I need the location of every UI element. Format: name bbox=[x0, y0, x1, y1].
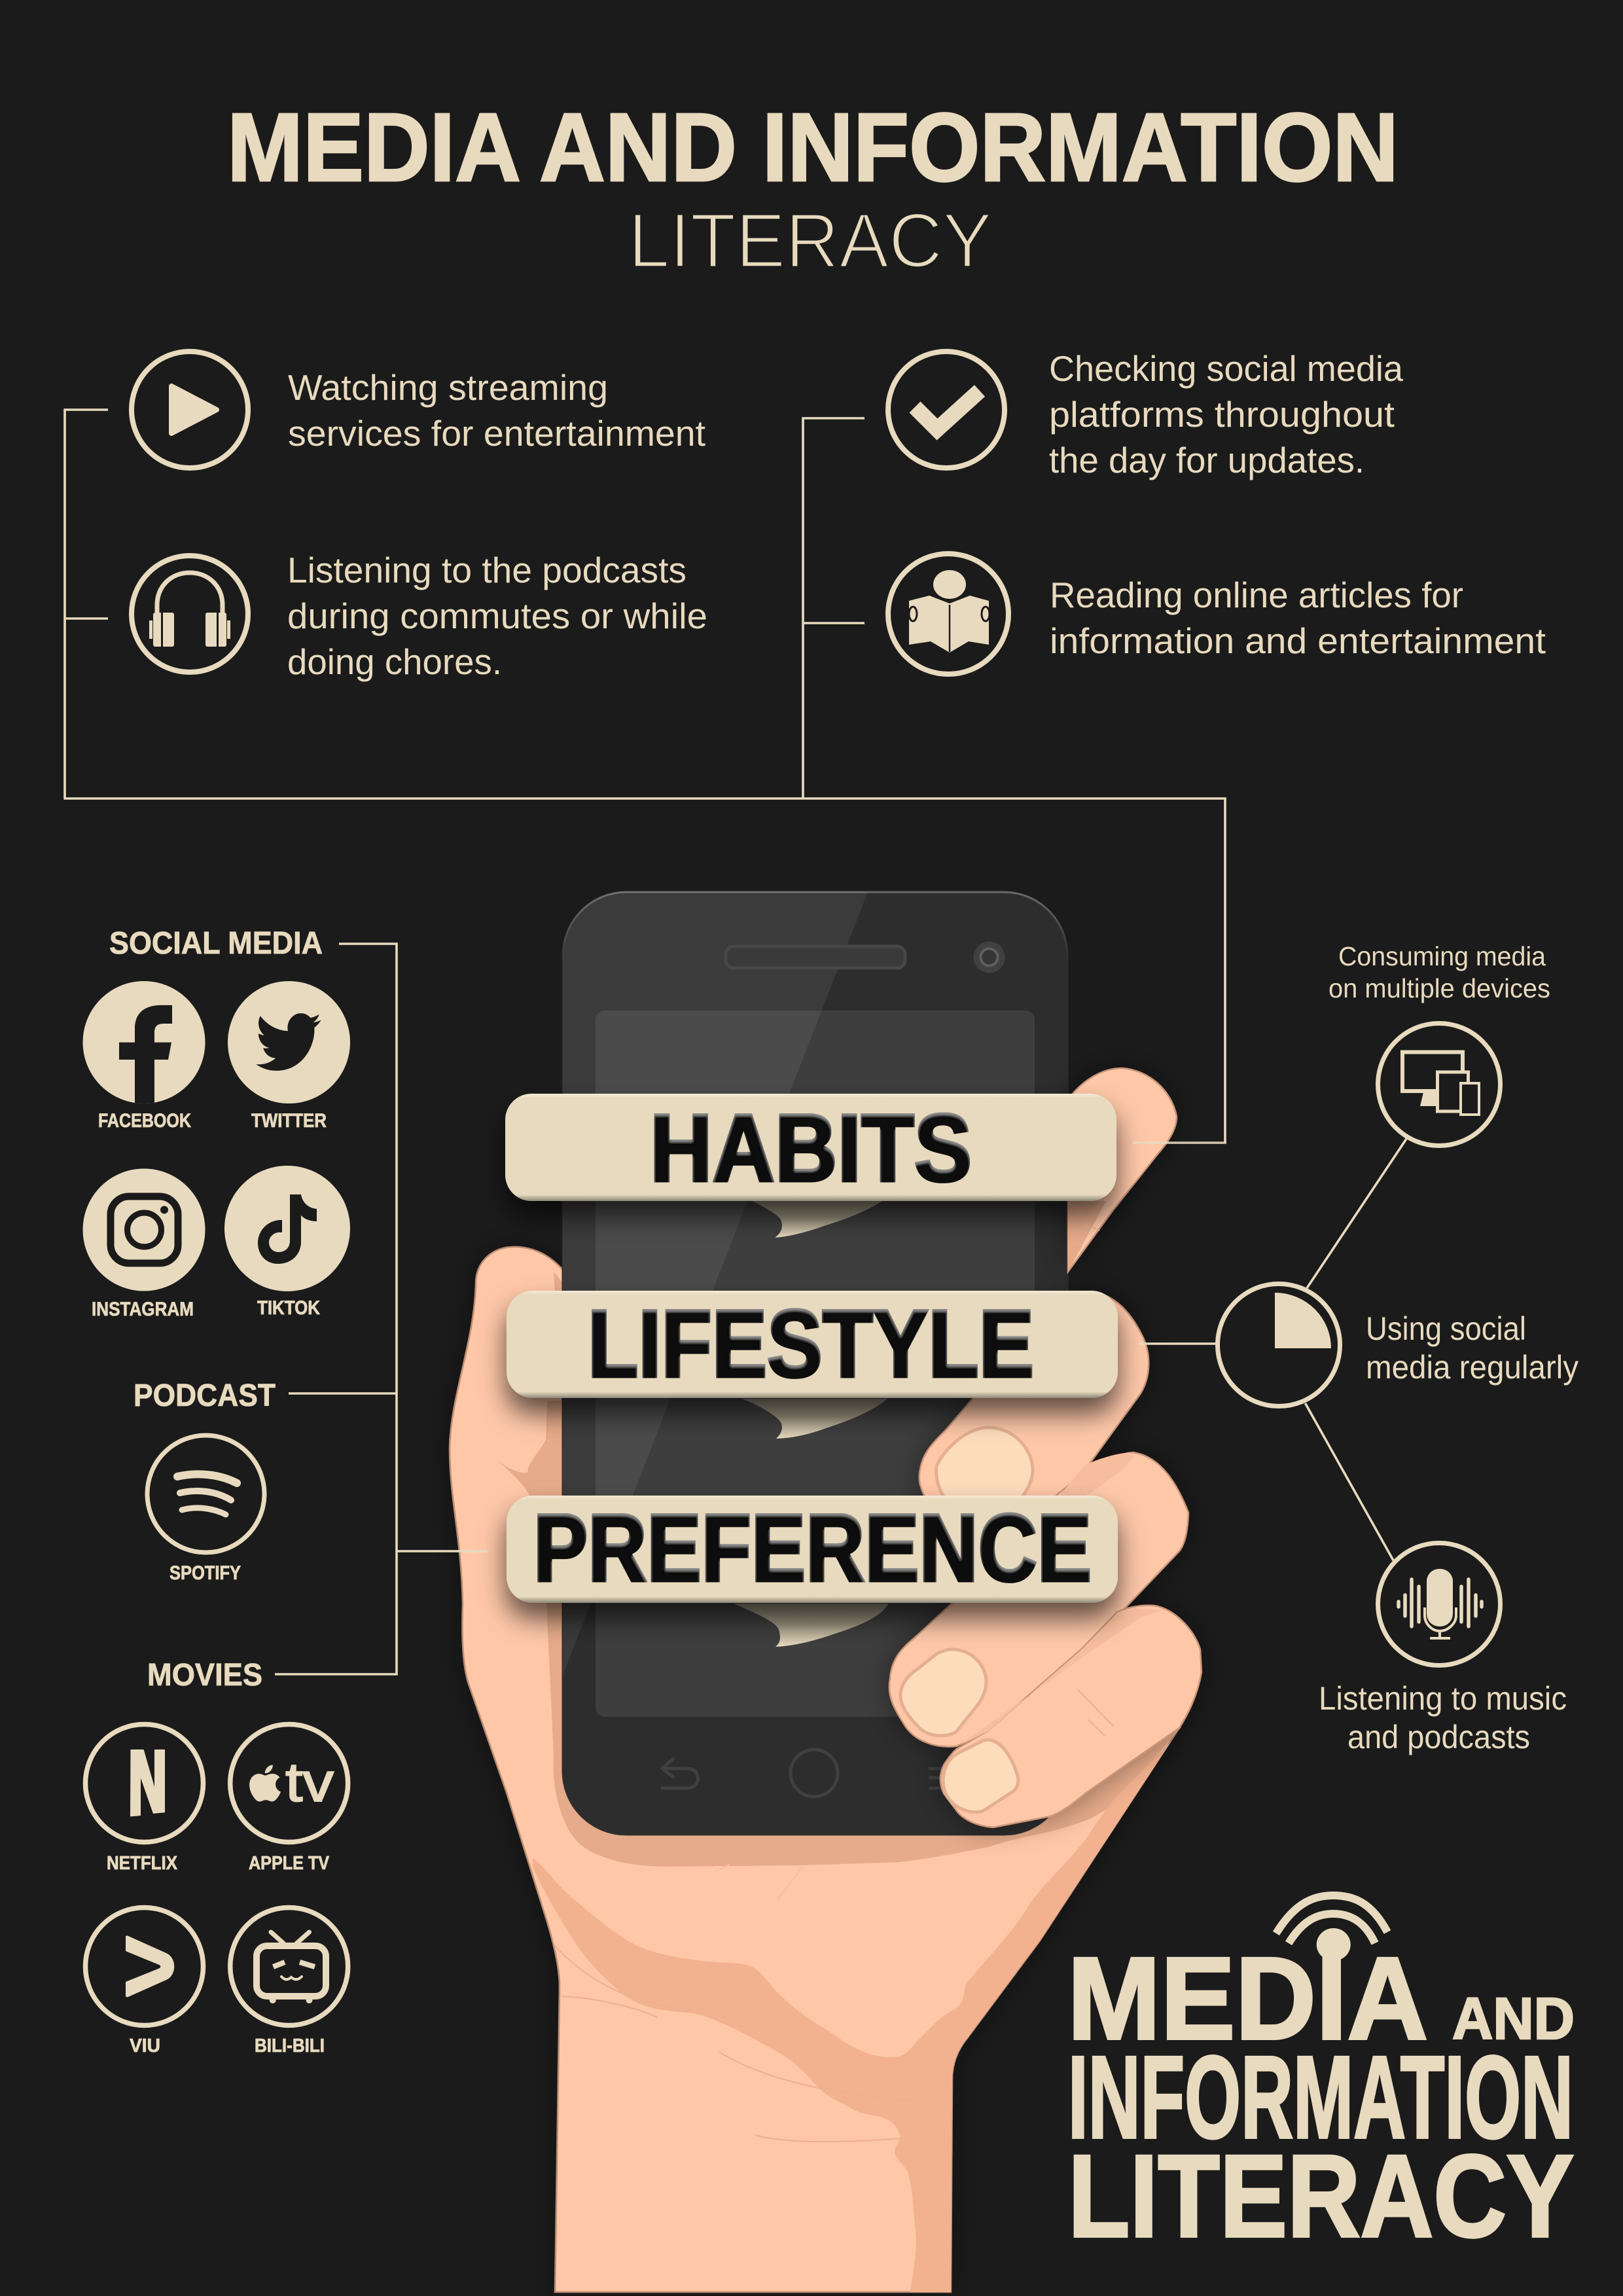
connector: habits to finger bbox=[1133, 1141, 1226, 1144]
label bar bbox=[505, 1094, 1116, 1201]
text: multiple devices bbox=[1329, 941, 1550, 1003]
text: reading: Reading online articles for bbox=[1050, 575, 1463, 615]
finger two bbox=[919, 1291, 1149, 1571]
text: streaming bbox=[288, 367, 705, 454]
text: social media regularly: media regularly bbox=[1366, 1349, 1578, 1386]
connector lines bbox=[275, 944, 488, 1674]
icon: play button bbox=[132, 351, 248, 468]
panel: streaming item bbox=[132, 351, 705, 468]
finger one bbox=[1068, 1068, 1177, 1272]
label: instagram: INSTAGRAM bbox=[92, 1299, 194, 1320]
text: multiple devices: on multiple devices bbox=[1329, 973, 1550, 1003]
text: reading: information and entertainment bbox=[1050, 620, 1546, 661]
logo: media and information literacy: AND bbox=[1452, 1986, 1575, 2052]
icon: viu bbox=[85, 1907, 203, 2025]
finger four bbox=[940, 1605, 1202, 1827]
panel: platforms sidebar bbox=[82, 926, 488, 2056]
panel: top habits connector lines bbox=[65, 410, 1225, 1143]
heading: movies: MOVIES bbox=[147, 1658, 262, 1693]
label: bili-bili: BILI-BILI bbox=[255, 2036, 325, 2056]
text: podcasts: during commutes or while bbox=[287, 596, 707, 636]
text: checking social: Checking social media bbox=[1049, 348, 1403, 389]
label: spotify: SPOTIFY bbox=[169, 1562, 241, 1584]
label: facebook: FACEBOOK bbox=[98, 1110, 191, 1132]
title: MEDIA AND INFORMATION bbox=[227, 94, 1399, 202]
icon: instagram bbox=[82, 1169, 205, 1291]
speech tail bbox=[734, 1604, 889, 1647]
phone bbox=[562, 892, 1067, 1835]
text: checking social: platforms throughout bbox=[1049, 394, 1395, 435]
icon: pie quarter bbox=[1217, 1284, 1340, 1406]
heading: podcast: PODCAST bbox=[134, 1378, 276, 1413]
screen reflection bbox=[562, 892, 868, 1677]
hand: fingers bbox=[889, 1068, 1202, 1827]
phone camera bbox=[974, 941, 1005, 973]
text: streaming: Watching streaming bbox=[288, 367, 608, 408]
phone speaker bbox=[726, 946, 905, 968]
label bar bbox=[507, 1496, 1118, 1603]
panel: social media item bbox=[888, 348, 1403, 480]
text: music and podcasts: Listening to music bbox=[1319, 1680, 1567, 1717]
text: streaming: services for entertainment bbox=[288, 413, 705, 454]
icon: tiktok bbox=[224, 1166, 350, 1291]
icon: twitter bbox=[228, 981, 350, 1103]
speech tail bbox=[742, 1399, 887, 1439]
label: viu: VIU bbox=[130, 2036, 160, 2056]
panel: habits label bbox=[505, 1094, 1116, 1238]
panel: reading item bbox=[888, 554, 1546, 674]
text: music and podcasts bbox=[1319, 1680, 1567, 1755]
label text: HABITS bbox=[650, 1094, 972, 1201]
label: twitter: TWITTER bbox=[251, 1110, 327, 1132]
logo text: MEDIA bbox=[1067, 1933, 1428, 2064]
icon: apple tv bbox=[230, 1724, 348, 1842]
title: LITERACY bbox=[628, 198, 992, 284]
label: tiktok: TIKTOK bbox=[257, 1297, 320, 1319]
panel: preference label bbox=[507, 1494, 1118, 1647]
text: podcasts: Listening to the podcasts bbox=[287, 550, 687, 590]
icon: microphone bbox=[1378, 1543, 1500, 1665]
label: netflix: NETFLIX bbox=[107, 1853, 178, 1874]
text: music and podcasts: and podcasts bbox=[1347, 1719, 1530, 1755]
label text: LIFESTYLE bbox=[588, 1290, 1034, 1397]
icon: netflix bbox=[85, 1724, 203, 1842]
icon: check mark bbox=[888, 351, 1005, 468]
text: podcasts bbox=[287, 550, 707, 682]
label: apple tv: APPLE TV bbox=[249, 1853, 330, 1874]
label bar bbox=[507, 1291, 1118, 1398]
icon: devices bbox=[1378, 1024, 1500, 1145]
logo: media and information literacy bbox=[1067, 1895, 1575, 2261]
panel: lifestyle label bbox=[507, 1290, 1118, 1439]
text: reading bbox=[1050, 575, 1546, 661]
icon: bili-bili bbox=[230, 1907, 348, 2025]
text: checking social: the day for updates. bbox=[1049, 440, 1364, 480]
text: checking social bbox=[1049, 348, 1403, 480]
text: podcasts: doing chores. bbox=[287, 641, 502, 682]
phone buttons bbox=[661, 1749, 949, 1797]
text: social media regularly bbox=[1366, 1310, 1578, 1386]
icon: reader bbox=[888, 554, 1008, 674]
label text: PREFERENCE bbox=[533, 1494, 1092, 1601]
icon: facebook bbox=[82, 981, 205, 1106]
finger three bbox=[889, 1452, 1188, 1747]
icon: apple tv: tv bbox=[285, 1751, 334, 1813]
connector lines bbox=[1139, 1139, 1406, 1560]
hand: palm and wrist behind the phone bbox=[450, 1247, 1181, 2292]
icon: spotify bbox=[147, 1435, 264, 1552]
panel: lifestyle detail bbox=[1139, 941, 1578, 1755]
panel: podcast item bbox=[132, 550, 707, 682]
text: social media regularly: Using social bbox=[1366, 1310, 1526, 1347]
icon: headphones bbox=[132, 556, 248, 672]
text: multiple devices: Consuming media bbox=[1338, 941, 1546, 971]
logo signal icon bbox=[1276, 1895, 1387, 1961]
speech tail bbox=[753, 1201, 882, 1238]
phone screen bbox=[596, 1011, 1035, 1717]
heading: social media: SOCIAL MEDIA bbox=[109, 926, 323, 961]
title bbox=[227, 94, 1399, 284]
